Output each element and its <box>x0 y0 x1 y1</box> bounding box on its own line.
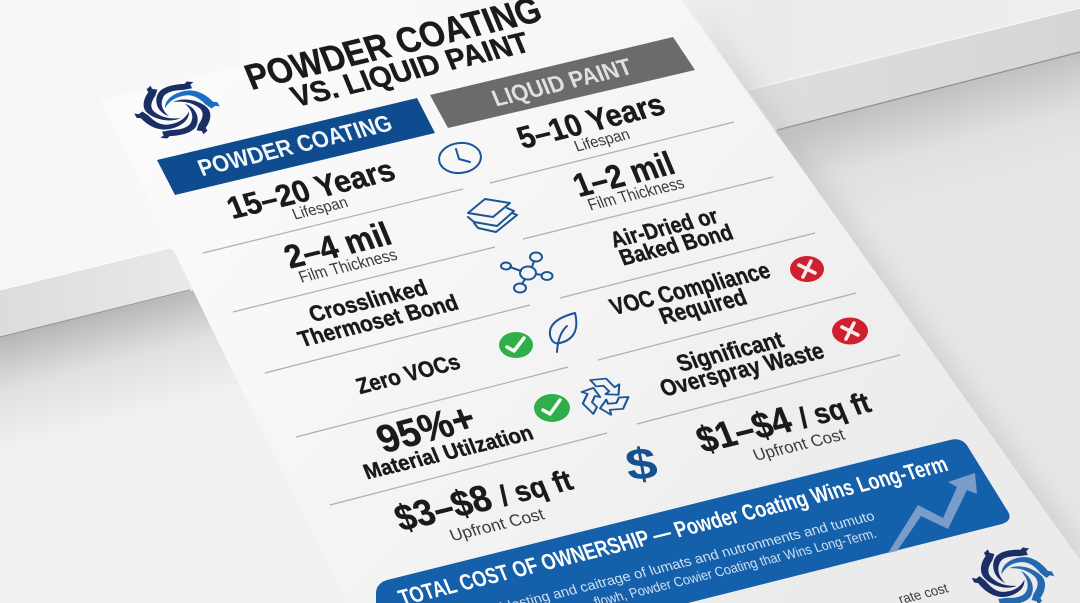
logo bottom right <box>953 535 1073 603</box>
column header: liquid paint <box>430 37 695 128</box>
right row: VOC compliance: VOC Compliance <box>606 257 774 321</box>
left row: bond <box>265 275 530 373</box>
left row: film thickness: Film Thickness <box>296 245 400 286</box>
left row: utilization: 95%+ <box>370 397 482 462</box>
callout panel: total cost of ownership <box>376 439 1010 603</box>
icon: red x 1 <box>790 256 824 282</box>
icon: green check 2 <box>534 394 570 422</box>
right row: overspray <box>637 327 900 424</box>
right row: bond: Air-Dried or <box>606 203 722 252</box>
trend arrow <box>888 473 977 553</box>
column header: liquid paint: LIQUID PAINT <box>488 54 636 112</box>
right row: bond: Baked Bond <box>615 219 737 270</box>
right row: film thickness: Film Thickness <box>585 174 687 214</box>
left row: bond: Thermoset Bond <box>294 289 462 352</box>
right row: cost: $1–$4 / sq ft <box>691 381 876 461</box>
icon: leaf <box>550 313 576 352</box>
icon: red x 2 <box>832 318 868 344</box>
left row: utilization <box>330 397 607 505</box>
right row: lifespan: Lifespan <box>572 126 633 155</box>
left row: lifespan <box>203 152 463 253</box>
logo top left <box>114 68 240 152</box>
right row: bond <box>560 203 815 298</box>
right row: film thickness <box>523 145 773 239</box>
right row: cost: Upfront Cost <box>750 425 848 465</box>
left row: VOCs <box>296 349 568 437</box>
left row: lifespan: Lifespan <box>290 194 351 223</box>
title: VS. LIQUID PAINT <box>286 27 535 114</box>
left row: VOCs: Zero VOCs <box>352 349 464 399</box>
column header: powder coating: POWDER COATING <box>194 110 396 182</box>
icon: dollar sign: $ <box>622 438 661 490</box>
icon: clock <box>438 141 482 175</box>
right row: lifespan <box>490 86 734 183</box>
right row: VOC compliance <box>598 257 856 360</box>
right row: VOC compliance: Required <box>655 284 751 330</box>
left row: cost: Upfront Cost <box>447 505 547 545</box>
left row: bond: Crosslinked <box>305 275 431 327</box>
icon: recycle <box>572 377 633 421</box>
icon: network nodes <box>501 252 552 292</box>
left row: utilization: Material Utilzation <box>359 420 537 484</box>
left row: film thickness: 2–4 mil <box>279 216 397 276</box>
left row: lifespan: 15–20 Years <box>221 152 400 225</box>
left row: film thickness <box>233 216 495 312</box>
right row: film thickness: 1–2 mil <box>568 145 680 204</box>
left row: cost: $3–$8 / sq ft <box>389 458 578 540</box>
right row: overspray: Significant <box>673 327 788 377</box>
right row: lifespan: 5–10 Years <box>512 86 670 155</box>
icon: green check 1 <box>499 332 533 358</box>
right row: overspray: Overspray Waste <box>656 338 828 402</box>
column header: powder coating <box>157 98 435 195</box>
icon: layers <box>468 199 517 232</box>
